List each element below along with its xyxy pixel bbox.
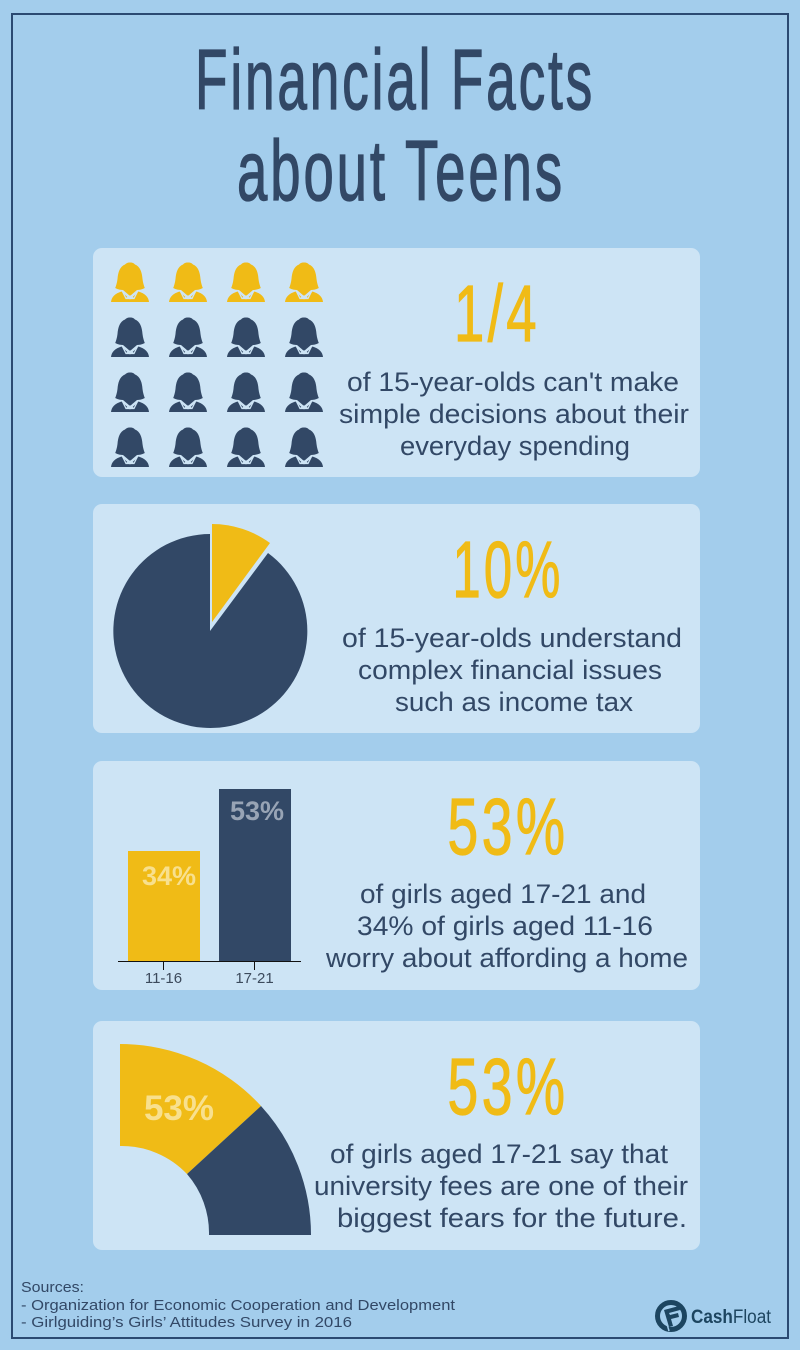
donut chart: 53% xyxy=(144,1089,214,1128)
sources: - Organization for Economic Cooperation and Development xyxy=(21,1297,456,1314)
panel: ten percent xyxy=(93,504,700,733)
sources: Sources: xyxy=(21,1279,84,1296)
panel: university fees xyxy=(93,1021,700,1250)
description: of girls aged 17-21 say that xyxy=(330,1139,669,1169)
statistic: 1/4: 1/4 xyxy=(454,269,540,358)
bar chart: 11-16 xyxy=(145,970,182,987)
panel: one in four xyxy=(93,248,700,477)
statistic: 53%: 53% xyxy=(448,1042,568,1131)
description: complex financial issues xyxy=(358,655,662,685)
description: of 15-year-olds understand xyxy=(342,623,682,653)
statistic: 10%: 10% xyxy=(452,525,564,614)
icon: logo mark xyxy=(658,1302,684,1331)
description: biggest fears for the future. xyxy=(337,1203,687,1233)
logo: CashFloat: CashFloat xyxy=(691,1307,772,1328)
description: university fees are one of their xyxy=(314,1171,688,1201)
bar chart: 34% xyxy=(142,861,196,891)
statistic: 53%: 53% xyxy=(448,782,568,871)
icon grid: people xyxy=(111,262,323,467)
description: 34% of girls aged 11-16 xyxy=(357,911,653,941)
description: of girls aged 17-21 and xyxy=(360,879,646,909)
description: worry about affording a home xyxy=(325,943,688,973)
description: simple decisions about their xyxy=(339,399,689,429)
description: such as income tax xyxy=(395,687,634,717)
donut chart xyxy=(120,1044,311,1235)
bar chart xyxy=(118,789,301,987)
sources: - Girlguiding’s Girls’ Attitudes Survey in 2016 xyxy=(21,1314,352,1331)
description: everyday spending xyxy=(400,431,630,461)
logo: CashFloat xyxy=(658,1302,772,1331)
description xyxy=(325,879,688,973)
bar chart: 53% xyxy=(230,796,284,826)
title xyxy=(195,33,595,219)
description xyxy=(314,1139,688,1233)
pie chart xyxy=(113,524,307,728)
bar chart: 17-21 xyxy=(235,970,274,987)
description xyxy=(342,623,682,717)
title: about Teens xyxy=(237,124,565,219)
sources xyxy=(21,1279,456,1331)
description xyxy=(339,367,689,461)
panel: home worries xyxy=(93,761,700,990)
description: of 15-year-olds can't make xyxy=(347,367,679,397)
